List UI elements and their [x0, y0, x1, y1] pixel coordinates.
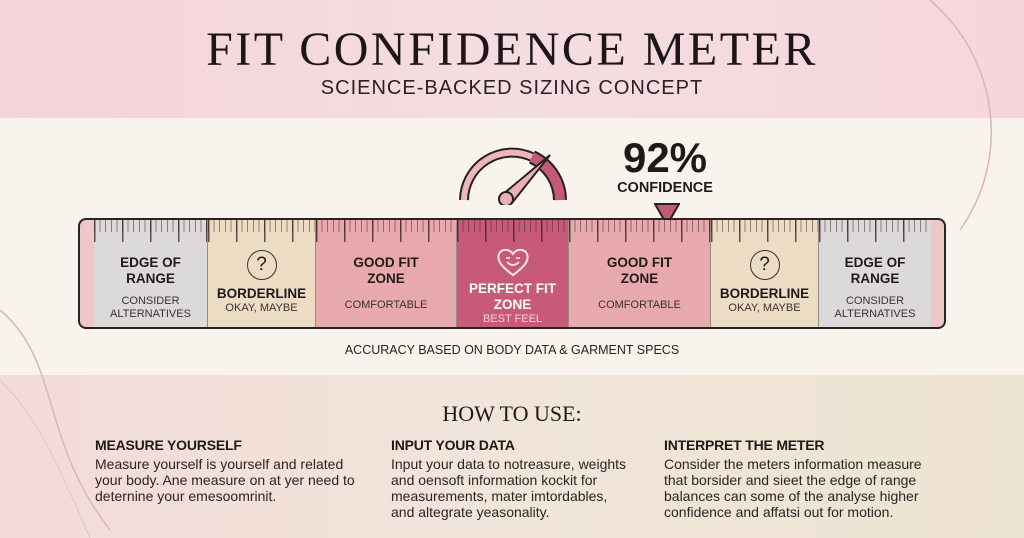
step: input: INPUT YOUR DATA	[391, 437, 515, 453]
zone: borderline left	[208, 220, 316, 327]
zone: edge left: ALTERNATIVES	[110, 308, 191, 320]
zone: edge right	[819, 220, 931, 327]
zone: edge right: ALTERNATIVES	[835, 308, 915, 320]
top band	[0, 0, 1024, 118]
zone: good fit left: ZONE	[367, 271, 405, 286]
confidence value: CONFIDENCE	[617, 180, 713, 196]
ruler meter	[78, 218, 946, 329]
zone: borderline right: ?	[759, 254, 770, 275]
caption: ACCURACY BASED ON BODY DATA & GARMENT SPECS	[345, 343, 679, 357]
zone: good fit left: COMFORTABLE	[345, 299, 427, 311]
zone: good fit right: GOOD FIT	[607, 255, 672, 270]
zone: good fit left: GOOD FIT	[353, 255, 419, 270]
zone: perfect fit: BEST FEEL	[483, 313, 542, 325]
zone: borderline left: ?	[256, 254, 267, 275]
confidence value	[617, 134, 713, 196]
step: interpret: Consider the meters information measure that borsider and sieet the edge of range balances can some of the analyse higher confidence and affatsi out for motion.	[664, 456, 922, 520]
icon: smiling heart	[497, 248, 529, 276]
step: measure: Measure yourself is yourself and related your body. Ane measure on at yer need to deternine your emesoomrinit.	[95, 456, 355, 504]
zone: borderline left: OKAY, MAYBE	[225, 302, 298, 314]
zone: borderline right	[711, 220, 819, 327]
bottom band	[0, 375, 1024, 538]
zone: good fit right: COMFORTABLE	[598, 299, 681, 311]
zone: perfect fit: PERFECT FIT	[469, 281, 556, 296]
zone: edge right: CONSIDER	[846, 295, 904, 307]
step: interpret: INTERPRET THE METER	[664, 437, 824, 453]
how to use heading: HOW TO USE:	[442, 401, 582, 426]
confidence value: 92%	[623, 134, 707, 181]
icon: gauge	[459, 148, 567, 205]
zone: good fit left	[316, 220, 457, 327]
zone: perfect fit: ZONE	[494, 297, 531, 312]
icon: pointer triangle	[654, 203, 680, 218]
zone: edge left: EDGE OF	[120, 255, 181, 270]
zone: good fit right: ZONE	[621, 271, 658, 286]
zone: edge right: RANGE	[851, 271, 899, 286]
zone: perfect fit	[457, 220, 569, 327]
subtitle: SCIENCE-BACKED SIZING CONCEPT	[321, 77, 703, 99]
step: measure: MEASURE YOURSELF	[95, 437, 242, 453]
zone: borderline right: OKAY, MAYBE	[728, 302, 801, 314]
zone: borderline left: BORDERLINE	[217, 286, 306, 301]
step: input: Input your data to notreasure, weights and oensoft information kockit for measurements, mater imtordables, and altegrate yeasonality.	[391, 456, 626, 520]
zone: edge left: CONSIDER	[121, 295, 180, 307]
zone: edge left: RANGE	[126, 271, 175, 286]
zone: edge left	[94, 220, 208, 327]
zone: edge right: EDGE OF	[845, 255, 905, 270]
zone: good fit right	[569, 220, 711, 327]
title: FIT CONFIDENCE METER	[206, 23, 818, 76]
zone: borderline right: BORDERLINE	[720, 286, 809, 301]
